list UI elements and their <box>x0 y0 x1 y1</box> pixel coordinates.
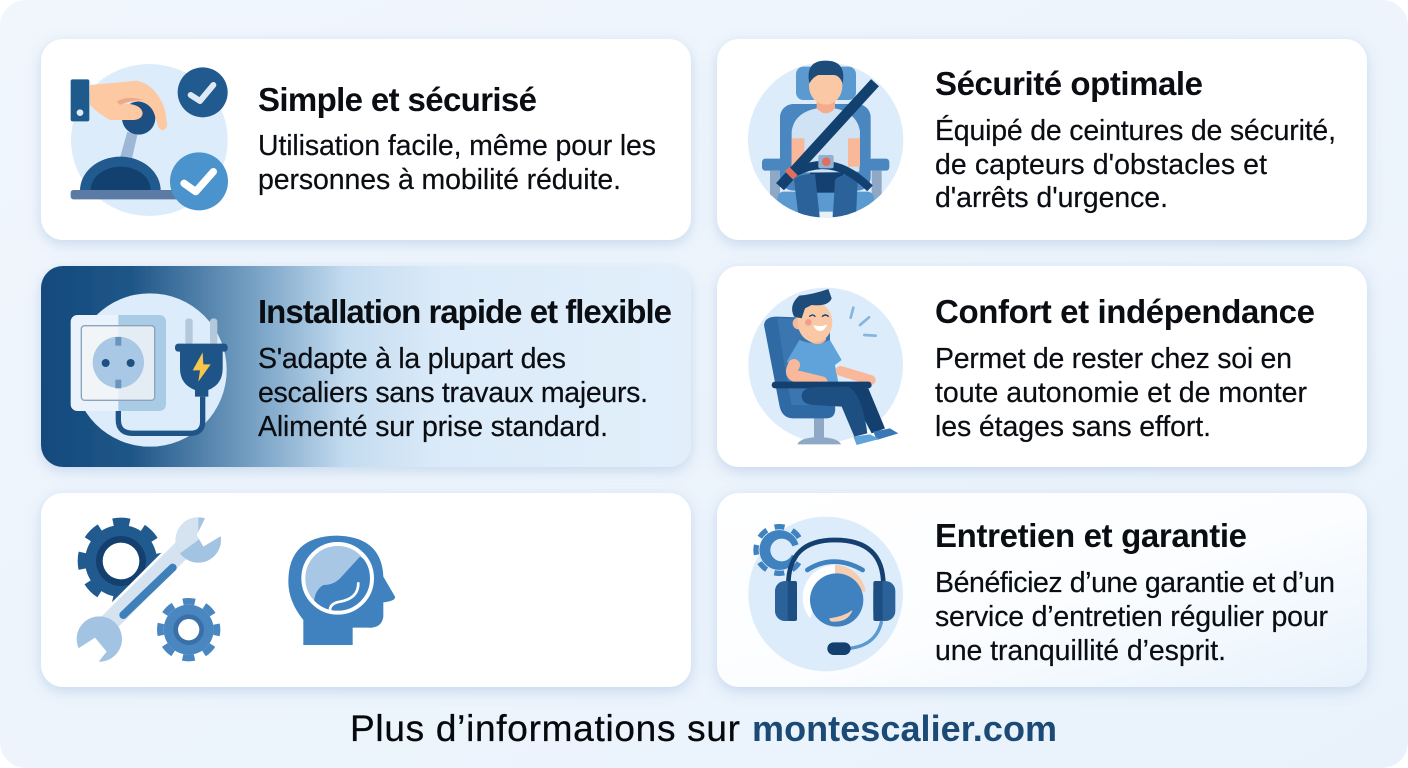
icon: head profile <box>288 536 395 645</box>
footer link line <box>350 708 1057 749</box>
text block: S'adapte à la plupart des <box>258 343 566 375</box>
heading: Installation rapide et flexible <box>258 293 672 330</box>
text block <box>935 115 1336 214</box>
panel: sécurité optimale <box>717 39 1367 240</box>
icon: lever with checks <box>71 64 228 216</box>
heading: Entretien et garantie <box>935 517 1247 554</box>
text block: service d’entretien régulier pour <box>935 601 1328 633</box>
text block <box>258 130 656 196</box>
text block: escaliers sans travaux majeurs. <box>258 377 648 409</box>
text block: les étages sans effort. <box>935 411 1211 443</box>
icon: smiling man in chair <box>748 288 903 445</box>
text block: Alimenté sur prise standard. <box>258 411 608 443</box>
text block: Permet de rester chez soi en <box>935 343 1292 375</box>
icon: headset and gear <box>748 517 903 671</box>
text block: d'arrêts d'urgence. <box>935 182 1168 214</box>
panel: installation rapide <box>41 266 691 467</box>
icon: gears and wrench <box>73 515 223 668</box>
panel: confort et indépendance <box>717 266 1367 467</box>
text block: Utilisation facile, même pour les <box>258 130 656 162</box>
heading: Confort et indépendance <box>935 293 1315 330</box>
text block <box>258 343 648 443</box>
text block <box>935 567 1335 667</box>
panel: entretien et garantie <box>717 493 1367 687</box>
panel: simple et sécurisé <box>41 39 691 240</box>
heading: Sécurité optimale <box>935 65 1203 102</box>
icon: socket and plug <box>71 293 228 447</box>
text block: personnes à mobilité réduite. <box>258 164 621 196</box>
text block: une tranquillité d’esprit. <box>935 635 1226 667</box>
icon: person with seat belt <box>748 61 903 220</box>
text block: Équipé de ceintures de sécurité, <box>935 115 1336 147</box>
footer link line: Plus d’informations sur <box>350 708 740 749</box>
footer link line: montescalier.com <box>752 708 1057 749</box>
panel: empty card with icons <box>41 493 691 687</box>
text block: toute autonomie et de monter <box>935 377 1308 409</box>
text block: de capteurs d'obstacles et <box>935 149 1267 181</box>
text block: Bénéficiez d’une garantie et d’un <box>935 567 1335 599</box>
text block <box>935 343 1308 443</box>
heading: Simple et sécurisé <box>258 81 537 118</box>
